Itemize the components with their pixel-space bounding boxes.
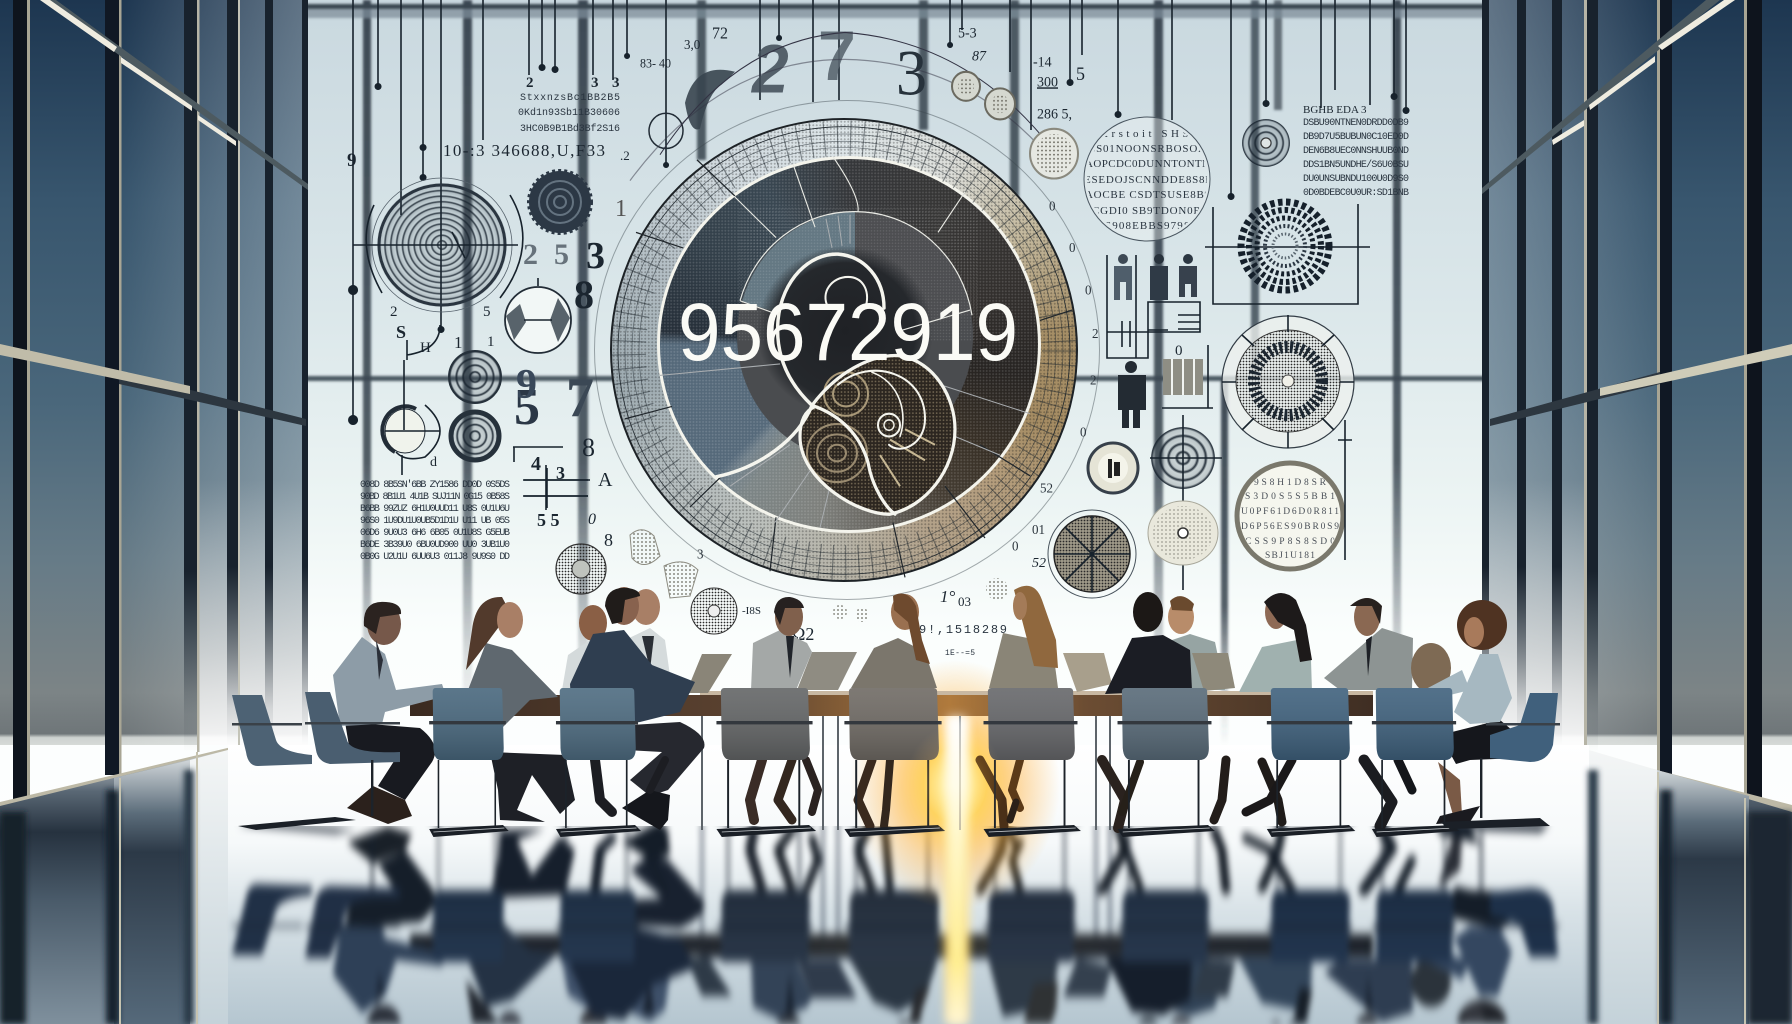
ring grid ticks — [618, 127, 1070, 574]
lettered circle top: S908EBBS979S — [1105, 220, 1190, 232]
numerals above the wheel: 2 — [750, 31, 789, 108]
numbers on the left: H — [420, 340, 431, 356]
lower spiral shell — [800, 356, 955, 514]
radial dot disc with axis — [1205, 202, 1370, 304]
sectioned circle — [505, 278, 571, 353]
lettered circle top: ESEDOJSCNNDDE8S8E — [1084, 174, 1212, 186]
spiral linework and number — [612, 120, 1098, 580]
numerals above the wheel: 3,0 — [684, 37, 701, 52]
disc sectors — [660, 157, 1030, 528]
numbers on the left — [347, 75, 630, 550]
ring scale marks: 2 — [1090, 372, 1096, 388]
ring scale marks: 0 — [1069, 240, 1076, 255]
numbers on the left: 9 — [347, 150, 356, 171]
garbled text block, lower left: B6BB 99ZUZ 6H1U0UUD11 U8S 0U1U6U — [360, 504, 510, 515]
numerals above the wheel: 286 5, — [1037, 106, 1072, 122]
small text lines, upper left — [518, 93, 620, 135]
lettered ring lower right: U0PF61D6D0R811 — [1241, 507, 1339, 517]
meeting scene — [229, 586, 1562, 1024]
dotted disc, lower left — [556, 544, 606, 594]
lettered ring lower right: 9S8H1D8SR — [1254, 478, 1327, 488]
floor reflection of the meeting — [232, 813, 1560, 1024]
garbled text block, lower left — [360, 479, 510, 563]
ornaments at the bottom of the wheel: -I8S — [742, 605, 761, 617]
left glass wall — [0, 0, 308, 810]
numerals above the wheel — [630, 16, 1085, 181]
numbers on the left: 5 — [483, 304, 490, 320]
numbers on the left: 8 — [582, 433, 595, 462]
numbers on the left: 8 — [604, 530, 613, 550]
ring scale marks: 01 — [1032, 522, 1045, 537]
garbled text block, lower left: 0B0G U2U1U 6UU6U3 011J8 9U9S0 DD — [360, 552, 510, 563]
numbers on the left: 8 — [574, 272, 594, 317]
numbers on the left: 3 — [586, 235, 605, 277]
small text lines, upper left: 0Kd1n93Sb11B30606 — [518, 107, 620, 119]
numerals above the wheel: 3 — [896, 38, 927, 109]
lettered circle top: AOPCDC0DUNNTONTN — [1085, 158, 1210, 170]
numbers on the left: 10-:3 346688,U,F33 — [443, 141, 605, 160]
lettered circle top: BS01NOONSRBOSOD — [1088, 143, 1206, 155]
dial with spokes — [1032, 510, 1136, 598]
numbers on the left: 3 — [612, 75, 620, 91]
lettered circle top: AOCBE CSDTSUSE8B9 — [1085, 189, 1210, 201]
numbers on the left: 2 — [523, 238, 538, 271]
text block top right — [1303, 104, 1409, 199]
numbers on the left: 2 — [390, 304, 398, 320]
text block top right: DDS1BN5UNDHE/S6U0BSU — [1303, 159, 1409, 171]
garbled text block, lower left: 06D6 9U0U3 6H6 6B05 0U1U8S G5EUB — [360, 528, 510, 539]
white spiral curves — [716, 254, 955, 514]
number 95672919: 95672919 — [678, 287, 1018, 378]
lettered ring lower right: CSS9P8S8SD0 — [1245, 537, 1335, 547]
ornaments at the bottom of the wheel: 1E--=5 — [945, 649, 975, 658]
sunlight glow behind table — [850, 660, 1060, 1024]
numbers on the left: 5 — [554, 238, 569, 271]
text block top right: DEN6B8UEC0NNSHUUB0ND — [1303, 146, 1409, 157]
large dotted wheel right — [1222, 315, 1354, 448]
numerals above the wheel: 83- 40 — [640, 56, 671, 71]
ring scale marks: 52 — [1040, 480, 1053, 495]
numbers on the left: 1 — [454, 333, 462, 352]
text block top right: 0D0BDEBC0U0UR:SD1BNB — [1303, 188, 1409, 199]
outer thin ring — [594, 100, 1100, 600]
ring scale marks: 0 — [1080, 424, 1087, 440]
text block top right: BGHB EDA 3 — [1303, 104, 1367, 116]
large ringed spiral, left — [353, 178, 523, 312]
small text lines, upper left: StxxnzsBc1BB2B5 — [520, 93, 620, 104]
small text lines, upper left: 3HC0B9B1Bd3Bf2S16 — [520, 123, 620, 135]
spiral rosette top right — [1242, 119, 1290, 167]
right glass wall — [1482, 0, 1792, 813]
ring scale marks: 3 — [697, 547, 704, 562]
garbled text block, lower left: 90BD 8B1U1 4U1B SUJ11N 0G15 0B58S — [360, 492, 510, 503]
lettered circle top — [1084, 117, 1212, 241]
math diagrams on the glass — [348, 0, 1410, 655]
numbers on the left: 2 — [526, 75, 534, 91]
dark inner disc — [657, 156, 1041, 533]
numerals above the wheel: 72 — [712, 23, 728, 43]
ring scale marks: 0 — [1012, 538, 1019, 553]
people icons and chart boxes: 0 — [1175, 343, 1182, 359]
ring scale marks — [697, 198, 1098, 562]
numerals above the wheel: -14 — [1033, 54, 1052, 71]
garbled text block, lower left: 008D 8B5SN'6BB ZY1586 DD0D 0S5DS — [360, 479, 510, 491]
glossy floor — [0, 745, 1792, 1024]
ornaments at the bottom of the wheel: 9!,1518289 — [919, 623, 1007, 637]
crescent circle: d — [430, 455, 437, 470]
numbers on the left: 0 — [588, 511, 596, 528]
cog ring — [529, 171, 591, 233]
numbers on the left: 1 — [487, 334, 494, 350]
fraction lines — [513, 447, 590, 510]
ring scale marks: 0 — [1085, 282, 1092, 298]
numbers on the left: 5 — [514, 379, 540, 436]
numbers on the left: 5 5 — [537, 510, 560, 530]
ornaments at the bottom of the wheel: Ω2 — [792, 624, 814, 644]
dial with spokes: 52 — [1032, 556, 1046, 571]
numbers on the left: 7 — [566, 367, 594, 429]
text block top right: DB9D7U5BUBUN0C10ED0D — [1303, 132, 1409, 143]
hanging lines with end dots, right — [1067, 0, 1410, 200]
ring scale marks: 0 — [1049, 198, 1056, 214]
numerals above the wheel: 5 — [1076, 64, 1085, 84]
dotted outer ring — [610, 118, 1078, 582]
ornaments at the bottom of the wheel: 03 — [958, 594, 971, 609]
lettered ring lower right: S3D0S5S5BB1 — [1245, 492, 1335, 502]
numbers on the left: 4 — [531, 453, 541, 475]
ring sector dividers — [625, 160, 1072, 577]
text block top right: DU0UNSUBNDU100U0D9S0 — [1303, 174, 1409, 185]
sunlight over the legs — [905, 716, 1005, 1024]
numbers on the left: .2 — [620, 148, 630, 163]
spiral labyrinth icon — [1150, 415, 1222, 590]
speckled disc — [1148, 501, 1218, 565]
central golden spiral wheel — [594, 100, 1100, 600]
crescent circle — [382, 325, 440, 475]
numbers on the left: A — [598, 469, 613, 491]
numerals above the wheel: 7 — [818, 16, 856, 95]
small rosettes top right — [952, 72, 1078, 179]
lettered ring lower right — [1237, 420, 1352, 569]
ring scale marks: 2 — [1092, 326, 1098, 341]
lettered circle top: CGDI0 SB9TDON0R9 — [1092, 205, 1208, 217]
ornaments at the bottom of the wheel — [630, 530, 1008, 658]
people icons and chart boxes — [1107, 254, 1213, 428]
table, people and chairs — [232, 586, 1560, 837]
numbers on the left: 1 — [615, 196, 627, 222]
garbled text block, lower left: 96S0 1U9DU1U0UB5D1D1U U11 UB 05S — [360, 516, 510, 527]
text block top right: DSBU90NTNEN0DRDD0DB9 — [1303, 118, 1409, 129]
numerals above the wheel: 5-3 — [958, 25, 977, 42]
lettered circle top: Xrstoit SHSN — [1100, 128, 1200, 140]
window mullions — [0, 0, 1792, 745]
garbled text block, lower left: B6DE 3B39U0 6BU0UD900 UU0 3UB1U0 — [360, 540, 510, 551]
lettered ring lower right: SBJ1U181 — [1265, 551, 1315, 561]
lettered ring lower right: D6P56ES90BR0S9 — [1241, 522, 1339, 532]
numbers on the left: 3 — [591, 75, 598, 91]
numerals above the wheel: 87 — [972, 48, 987, 64]
numerals above the wheel: 300 — [1037, 74, 1058, 90]
hanging lines with end dots, left — [348, 0, 1031, 425]
concentric circle pair — [449, 351, 501, 461]
ornaments at the bottom of the wheel: 1° — [940, 587, 956, 606]
numbers on the left: 9 — [516, 362, 537, 408]
numbers on the left: 3 — [556, 463, 565, 483]
framed button icon — [1088, 443, 1138, 493]
numbers on the left: S — [396, 322, 406, 342]
